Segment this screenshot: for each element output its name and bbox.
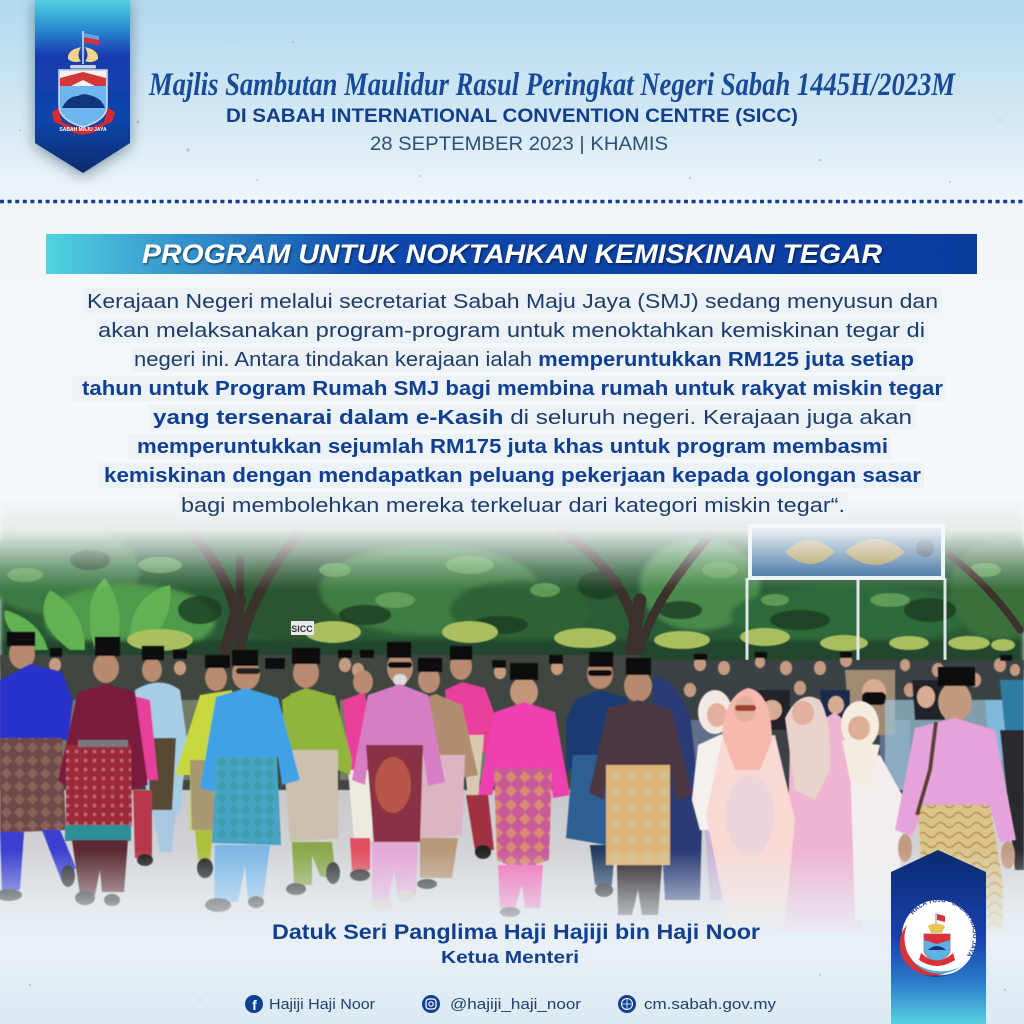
- body paragraph: Kerajaan Negeri melalui secretariat Sabah Maju Jaya (SMJ) sedang menyusun dan: [87, 291, 938, 313]
- tree trunks: [190, 530, 1020, 650]
- top-left ribbon with state crest: [35, 0, 130, 173]
- small SICC sign: [291, 621, 314, 635]
- speaker name: Datuk Seri Panglima Haji Hajiji bin Haji Noor: [272, 921, 760, 944]
- small SICC sign: SICC: [291, 624, 313, 634]
- social: website: [618, 995, 777, 1013]
- body paragraph: memperuntukkan sejumlah RM175 juta khas untuk program membasmi: [137, 436, 888, 458]
- person: pale blue man: [135, 646, 187, 852]
- heading banner: PROGRAM UNTUK NOKTAHKAN KEMISKINAN TEGAR: [142, 239, 883, 269]
- social: instagram: @hajiji_haji_noor: [450, 996, 581, 1013]
- heading banner: [46, 234, 977, 274]
- social: facebook: Hajiji Haji Noor: [269, 996, 375, 1013]
- banana leaves: [4, 578, 171, 650]
- social: facebook: f: [252, 997, 257, 1013]
- person: white hijab woman: [692, 690, 733, 900]
- person: lime man: [175, 655, 232, 878]
- icon: Hala Tuju Sabah Maju Jaya badge: HALA TUJU • SABAH MAJU JAYA: [910, 898, 978, 956]
- person: white hijab woman right: [841, 701, 905, 920]
- body paragraph: yang tersenarai dalam e-Kasih di seluruh negeri. Kerajaan juga akan: [153, 407, 912, 429]
- person: blue man: [0, 632, 76, 901]
- social: instagram: [422, 995, 581, 1013]
- date: 28 SEPTEMBER 2023 | KHAMIS: [370, 133, 668, 155]
- body paragraph: akan melaksanakan program-program untuk menoktahkan kemiskinan tegar di: [98, 320, 925, 342]
- person: maroon man: [58, 637, 148, 906]
- social: website: cm.sabah.gov.my: [644, 996, 777, 1013]
- photo: leaders and crowd walking: [0, 490, 1024, 946]
- signboard: [747, 524, 945, 665]
- bottom-right ribbon with badge: [891, 850, 986, 1024]
- road: [0, 790, 1024, 946]
- person: navy man: [566, 652, 628, 897]
- topiary hedges: [127, 621, 1015, 651]
- person: magenta sleeve man behind: [130, 695, 158, 866]
- person: peach hijab woman: [706, 688, 795, 925]
- person: blue centre man: [200, 650, 300, 912]
- person: pink dress woman: [780, 697, 862, 930]
- person: brown man: [417, 658, 478, 889]
- body paragraph: negeri ini. Antara tindakan kerajaan ialah memperuntukkan RM125 juta setiap: [134, 349, 914, 371]
- body paragraph: bagi membolehkan mereka terkeluar dari kategori miskin tegar“.: [181, 495, 845, 517]
- person: navy hijab woman behind: [652, 678, 702, 900]
- icon: Sabah coat of arms: [52, 31, 115, 134]
- photo backdrop: trees and foliage: [0, 500, 1024, 670]
- person: magenta sleeve man left of pink man: [343, 670, 373, 881]
- body paragraph: [72, 288, 945, 517]
- person: pink man with sunglasses: [352, 642, 445, 911]
- photo bottom fade: [0, 850, 1024, 946]
- people walking: [0, 632, 1016, 930]
- body paragraph: tahun untuk Program Rumah SMJ bagi membina rumah untuk rakyat miskin tegar: [82, 378, 943, 400]
- background crowd: [0, 648, 1024, 870]
- person: man with sling bag: [895, 667, 1016, 930]
- foliage dapples: [7, 550, 1001, 634]
- person: dark brown man: [589, 658, 692, 915]
- person: green man: [282, 648, 352, 895]
- person: magenta back man: [445, 646, 495, 859]
- person: magenta man: [478, 663, 570, 917]
- subtitle: venue: DI SABAH INTERNATIONAL CONVENTION CENTRE (SICC): [226, 105, 798, 127]
- icon: Hala Tuju Sabah Maju Jaya badge: [898, 898, 978, 977]
- body paragraph: kemiskinan dengan mendapatkan peluang pekerjaan kepada golongan sasar: [104, 465, 921, 487]
- speaker role: Ketua Menteri: [441, 947, 579, 967]
- icon: Sabah coat of arms: SABAH MAJU JAYA: [59, 127, 107, 133]
- photo top fade: [0, 490, 1024, 590]
